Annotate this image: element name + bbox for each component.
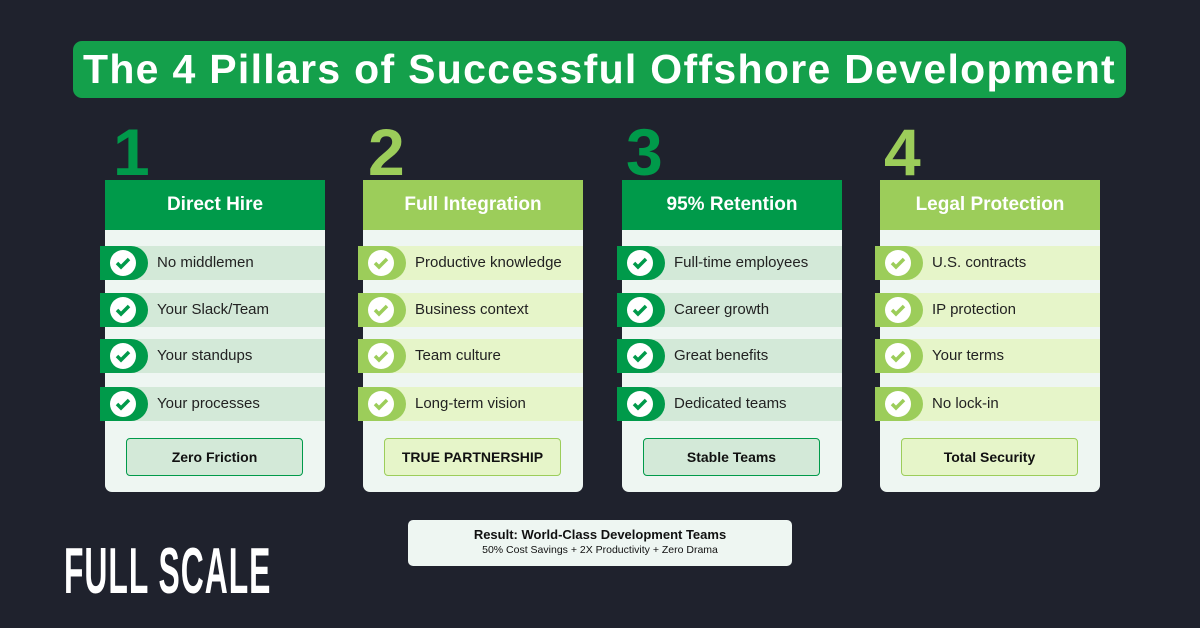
header: Direct Hire (167, 194, 263, 215)
item: IP protection (932, 301, 1016, 318)
item: No lock-in (932, 395, 999, 412)
header: Full Integration (404, 194, 542, 215)
label (901, 438, 1078, 476)
header (880, 180, 1100, 230)
label (643, 438, 820, 476)
item (880, 387, 1100, 421)
item: Your standups (157, 347, 252, 364)
item: Your terms (932, 347, 1004, 364)
label: Total Security (944, 449, 1035, 465)
label: TRUE PARTNERSHIP (402, 449, 543, 465)
panel: full integration (363, 180, 583, 492)
header (363, 180, 583, 230)
header: Legal Protection (916, 194, 1064, 215)
item (105, 293, 325, 327)
item: Business context (415, 301, 528, 318)
panel: direct hire (105, 180, 325, 492)
header (105, 180, 325, 230)
item: Career growth (674, 301, 769, 318)
number 4: 4 (884, 115, 921, 189)
item: Team culture (415, 347, 501, 364)
header (622, 180, 842, 230)
result callout: 50% Cost Savings + 2X Productivity + Zero Drama (482, 544, 718, 556)
item: No middlemen (157, 254, 254, 271)
label: Zero Friction (172, 449, 257, 465)
item: Full-time employees (674, 254, 808, 271)
item (880, 339, 1100, 373)
number 3: 3 (626, 115, 663, 189)
item: U.S. contracts (932, 254, 1026, 271)
result callout: Result: World-Class Development Teams (474, 527, 726, 542)
item: Productive knowledge (415, 254, 562, 271)
item (105, 387, 325, 421)
number 2: 2 (368, 115, 405, 189)
item (880, 293, 1100, 327)
logo: FULL SCALE (64, 534, 271, 607)
label: Stable Teams (687, 449, 776, 465)
label (126, 438, 303, 476)
item (105, 339, 325, 373)
item: Your processes (157, 395, 260, 412)
panel: legal protection (880, 180, 1100, 492)
title: The 4 Pillars of Successful Offshore Development (83, 46, 1116, 92)
item: Dedicated teams (674, 395, 787, 412)
item (622, 246, 842, 280)
item (622, 339, 842, 373)
item (622, 387, 842, 421)
item (363, 246, 583, 280)
result callout (408, 520, 792, 566)
item (880, 246, 1100, 280)
header: 95% Retention (667, 194, 797, 215)
item: Long-term vision (415, 395, 526, 412)
item: Great benefits (674, 347, 768, 364)
item (363, 293, 583, 327)
item (105, 246, 325, 280)
item: Your Slack/Team (157, 301, 269, 318)
item (363, 387, 583, 421)
label (384, 438, 561, 476)
item (622, 293, 842, 327)
number 1: 1 (113, 115, 150, 189)
panel: retention (622, 180, 842, 492)
item (363, 339, 583, 373)
